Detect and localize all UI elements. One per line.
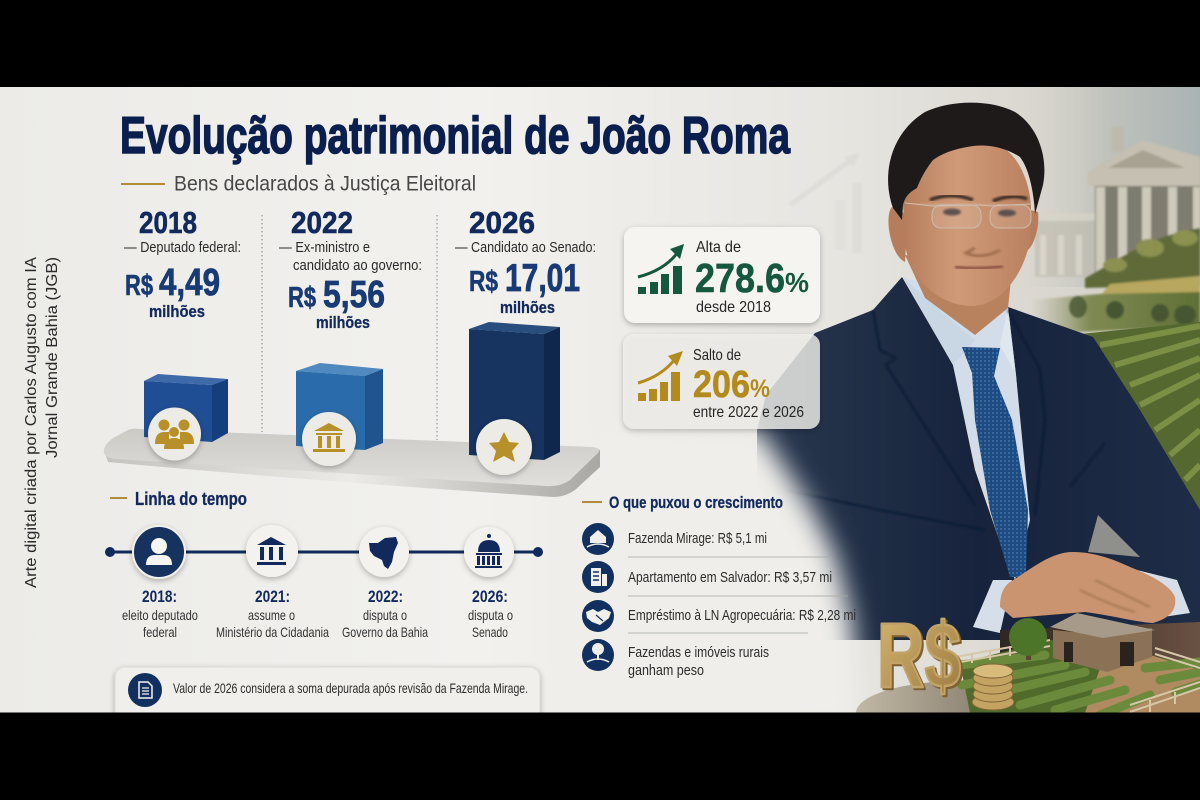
growth drivers list	[582, 523, 856, 679]
column 2026 text: R$	[469, 266, 498, 298]
vertical credit: Arte digital criada por Carlos Augusto com IA	[23, 257, 40, 588]
tie	[962, 347, 1028, 577]
icon: institution token	[302, 412, 356, 466]
timeline axis	[105, 547, 543, 557]
timeline	[105, 525, 543, 640]
shirt	[903, 277, 1030, 580]
heading: linha do tempo: Linha do tempo	[135, 489, 247, 509]
icon: gold growth chart	[638, 351, 683, 401]
note box: Valor de 2026 considera a soma depurada após revisão da Fazenda Mirage.	[173, 680, 528, 696]
column 2022 text	[279, 205, 422, 332]
mouth	[955, 266, 1003, 268]
gold coins	[972, 664, 1014, 710]
shirt cuffs	[973, 570, 1190, 633]
driver: Fazenda Mirage	[582, 523, 767, 555]
metal base	[856, 681, 1064, 745]
milestone 2018 label: 2018:	[142, 587, 177, 606]
icon: document	[128, 673, 162, 707]
milestone 2026 label: Senado	[472, 624, 508, 640]
milestone 2022 label	[342, 587, 428, 640]
meadow	[1030, 292, 1200, 334]
milestone 2018 icon	[133, 526, 185, 578]
icon: star token	[476, 419, 532, 475]
fences	[955, 640, 1200, 712]
lapels	[785, 310, 1105, 530]
milestone 2021 label: Ministério da Cidadania	[216, 624, 329, 640]
driver: Empréstimo: Empréstimo à LN Agropecuária: R$ 2,28 mi	[628, 608, 856, 624]
suit jacket	[757, 277, 1200, 640]
column 2022 text: — Ex-ministro e	[279, 239, 370, 256]
driver: Fazenda Mirage: Fazenda Mirage: R$ 5,1 mi	[628, 531, 767, 547]
milestone 2021 label	[216, 587, 329, 640]
milestone 2021 label: 2021:	[255, 587, 290, 606]
column 2026 text: 17,01	[505, 257, 580, 300]
card: alta de 278.6%: Alta de	[696, 239, 741, 256]
hair	[888, 103, 1044, 220]
column 2026 text	[455, 205, 596, 317]
tree	[1009, 618, 1047, 660]
note box	[115, 667, 540, 723]
gap between arm and torso	[1088, 515, 1140, 557]
column 2018 text: — Deputado federal:	[124, 239, 241, 256]
milestone 2021 label: assume o	[248, 607, 295, 623]
milestone 2018 label	[122, 587, 198, 640]
column 2022 text: R$	[288, 282, 316, 314]
palace wing	[1035, 213, 1100, 277]
vertical credit	[23, 257, 61, 588]
palace portico	[1088, 127, 1200, 275]
card: salto de 206%: 206	[693, 364, 750, 406]
milestone 2018 label: eleito deputado	[122, 607, 198, 623]
card: alta de 278.6%: desde 2018	[696, 299, 771, 316]
table with miniature farm	[856, 605, 1200, 745]
icon: green growth chart	[638, 244, 684, 294]
column 2022 text: 2022	[291, 205, 353, 240]
column 2018 text: milhões	[149, 302, 205, 321]
column 2026 text: — Candidato ao Senado:	[455, 239, 596, 256]
milestone 2026 label: 2026:	[472, 587, 508, 606]
faint background growth chart	[790, 153, 862, 253]
portrait of João Roma	[757, 103, 1200, 640]
milestone 2021 icon	[246, 525, 298, 577]
milestone 2022 label: disputa o	[363, 607, 407, 623]
scenery: palace and farmland	[1010, 87, 1200, 520]
driver: Fazendas e imóveis	[582, 639, 769, 679]
card: salto de 206%: %	[750, 375, 770, 403]
column 2022 text: 5,56	[323, 274, 385, 316]
driver: Fazendas e imóveis: Fazendas e imóveis rurais	[628, 645, 769, 661]
farm ground	[960, 640, 1200, 713]
eyebrows	[930, 196, 973, 200]
column 2026 text: 2026	[469, 205, 535, 240]
nose	[966, 248, 1000, 256]
card: alta de 278.6%: %	[785, 267, 809, 298]
milestone 2022 label: 2022:	[368, 587, 403, 606]
column 2018 text: 2018	[139, 205, 197, 240]
title: Evolução patrimonial de João Roma	[120, 107, 791, 165]
card: alta de 278.6%	[624, 227, 820, 323]
shirt collar	[903, 277, 975, 365]
milestone 2022 icon: Bahia map	[359, 527, 409, 577]
wheat field	[1100, 276, 1200, 296]
face	[903, 140, 1031, 306]
card: salto de 206%: entre 2022 e 2026	[693, 404, 804, 421]
3D bar 2026	[469, 322, 560, 460]
farmland rows	[1070, 322, 1200, 520]
milestone 2026 icon: capitol	[464, 527, 514, 577]
column 2022 text: candidato ao governo:	[293, 257, 422, 274]
column 2018 text	[124, 205, 241, 321]
heading: o que puxou o crescimento: O que puxou o crescimento	[609, 493, 783, 512]
platform	[104, 429, 600, 497]
driver: Apartamento	[582, 561, 832, 593]
gold R$: R$	[877, 605, 961, 707]
hill of trees	[1085, 228, 1200, 288]
3D bar 2022	[296, 363, 383, 450]
column 2026 text: milhões	[500, 298, 555, 317]
gold R$: R$	[879, 607, 963, 709]
page background	[0, 87, 1200, 713]
column separators	[262, 215, 437, 440]
eyes	[943, 208, 1016, 216]
subtitle: Bens declarados à Justiça Eleitoral	[174, 172, 476, 196]
milestone 2022 label: Governo da Bahia	[342, 624, 428, 640]
driver: Fazendas e imóveis: ganham peso	[628, 663, 704, 679]
icon: group token	[148, 408, 201, 460]
barn	[1050, 613, 1155, 672]
milestone 2018 label: federal	[143, 624, 177, 640]
hands	[1000, 552, 1175, 623]
fog fading the figure into the page	[590, 428, 860, 730]
milestone 2026 label: disputa o	[468, 607, 513, 623]
glasses	[905, 203, 1031, 228]
table top	[1000, 622, 1200, 713]
column 2018 text: 4,49	[159, 262, 220, 304]
neck	[905, 255, 1012, 335]
column 2018 text: R$	[125, 270, 153, 302]
card: alta de 278.6%: 278.6	[695, 255, 785, 301]
card: salto de 206%: Salto de	[693, 347, 741, 364]
vertical credit: Jornal Grande Bahia (JGB)	[44, 257, 61, 458]
column 2022 text: milhões	[316, 313, 370, 332]
ears	[888, 207, 908, 262]
crop rows	[960, 655, 1200, 715]
card: salto de 206%	[623, 334, 820, 429]
driver: Empréstimo	[582, 600, 856, 632]
3D bar 2018	[144, 374, 228, 442]
milestone 2026 label	[468, 587, 513, 640]
driver: Apartamento: Apartamento em Salvador: R$ 3,57 mi	[628, 570, 832, 586]
